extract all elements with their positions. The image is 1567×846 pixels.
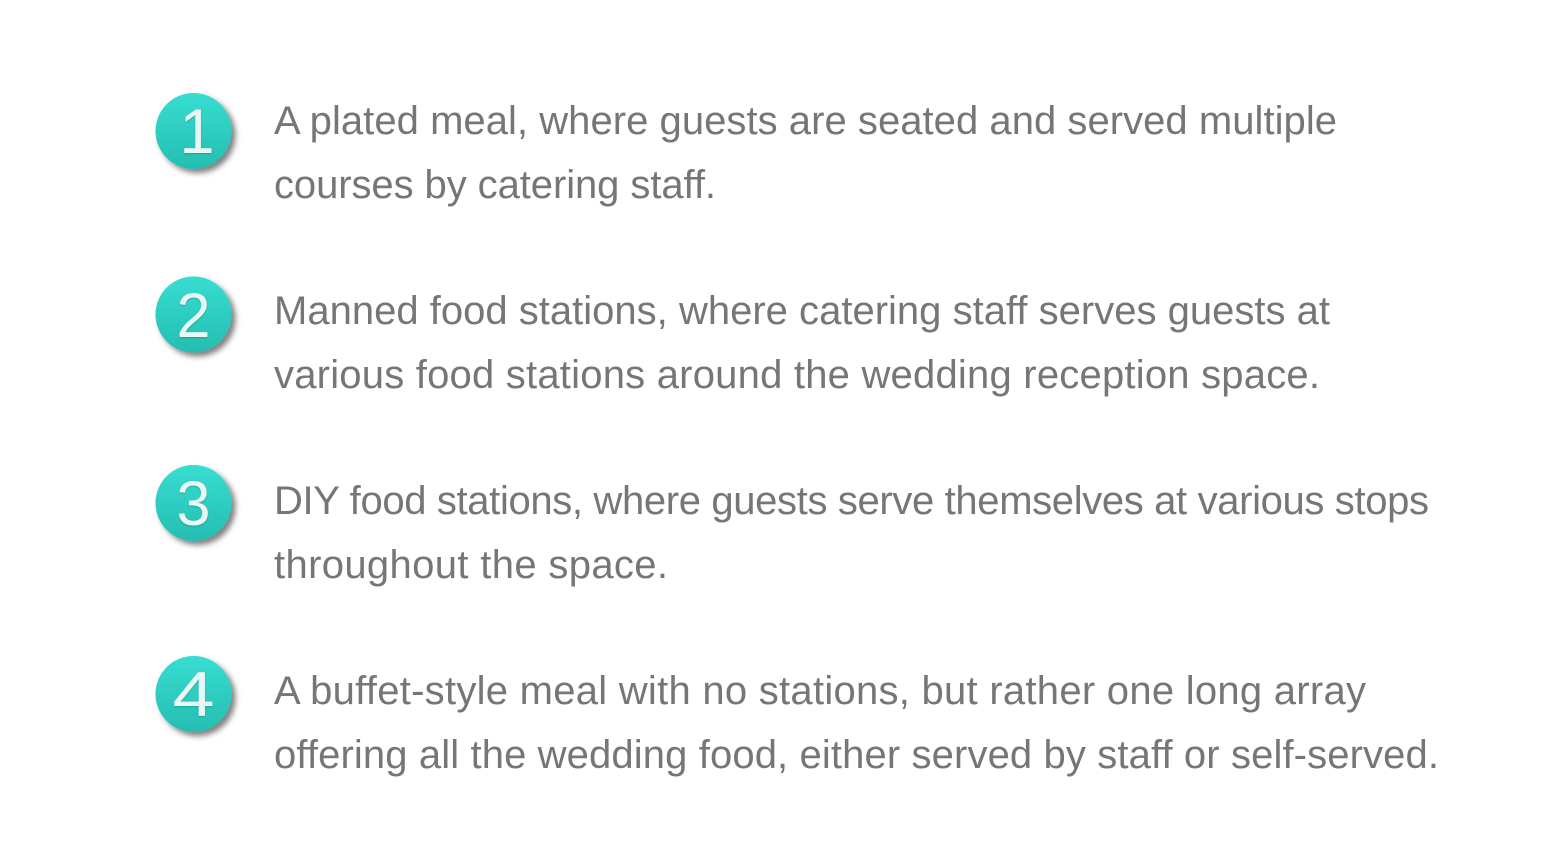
icon: number 2 badge — [156, 276, 232, 352]
text: item 2 description: various food stations around the wedding reception space. — [274, 353, 1320, 397]
text: item 1 description — [274, 99, 1337, 207]
text: item 4 description — [274, 669, 1439, 777]
text: item 4 description: A buffet-style meal with no stations, but rather one long array — [274, 669, 1366, 713]
item 4 — [156, 656, 1439, 777]
text: item 2 description: Manned food stations, where catering staff serves guests at — [274, 289, 1330, 333]
item 2 — [156, 276, 1330, 397]
icon: number 3 badge: 3 — [176, 469, 210, 539]
text: item 3 description: throughout the space. — [274, 543, 668, 587]
icon: number 1 badge — [156, 93, 232, 169]
text: item 1 description: courses by catering staff. — [274, 163, 716, 207]
icon: number 1 badge: 1 — [179, 97, 215, 167]
icon: number 4 badge: 4 — [172, 660, 214, 730]
item 1 — [156, 93, 1337, 207]
text: item 4 description: offering all the wedding food, either served by staff or self-served. — [274, 733, 1439, 777]
text: item 3 description — [274, 479, 1429, 587]
item 3 — [156, 465, 1429, 587]
text: item 2 description — [274, 289, 1330, 397]
text: item 3 description: DIY food stations, where guests serve themselves at various stops — [274, 479, 1429, 523]
icon: number 3 badge — [156, 465, 232, 541]
icon: number 2 badge: 2 — [176, 281, 210, 351]
icon: number 4 badge — [156, 656, 232, 732]
text: item 1 description: A plated meal, where guests are seated and served multiple — [274, 99, 1337, 143]
